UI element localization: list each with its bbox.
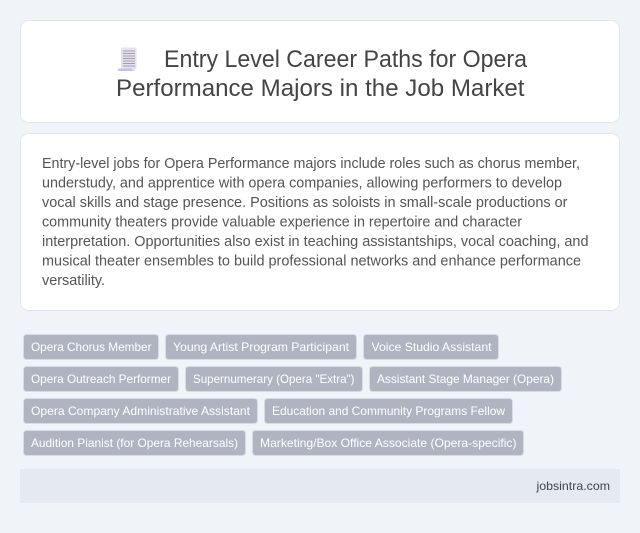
tag: Opera Chorus Member: Opera Chorus Member: [31, 340, 152, 354]
tag: Marketing/Box Office Associate: Marketing/Box Office Associate (Opera-specific): [260, 436, 516, 450]
icon: scroll document: [118, 48, 136, 71]
description text: interpretation. Opportunities also exist in teaching assistantships, vocal coaching, and: [42, 234, 588, 250]
title: [116, 46, 528, 102]
tag: Marketing/Box Office Associate: [252, 430, 524, 456]
tag: Opera Company Administrative Assistant: Opera Company Administrative Assistant: [31, 404, 251, 418]
title: Entry Level Career Paths for Opera: [164, 46, 528, 73]
tag: Assistant Stage Manager: [370, 366, 562, 392]
title: Performance Majors in the Job Market: [116, 75, 525, 102]
tag: Education and Community Programs Fellow: Education and Community Programs Fellow: [272, 404, 505, 418]
tags list: [24, 334, 562, 456]
description text: vocal skills and stage presence. Positions as soloists in small-scale productions or: [42, 195, 568, 211]
description text: versatility.: [42, 273, 105, 289]
footer source: jobsintra.com: [535, 479, 610, 493]
tag: Young Artist Program Participant: [166, 334, 356, 360]
description text: community theaters provide valuable experience in repertoire and character: [42, 214, 522, 230]
description text: Entry-level jobs for Opera Performance majors include roles such as chorus member,: [42, 156, 580, 172]
tag: Voice Studio Assistant: Voice Studio Assistant: [372, 340, 492, 354]
description text: musical theater ensembles to build professional networks and enhance performance: [42, 254, 581, 270]
tag: Opera Chorus Member: [24, 334, 158, 360]
tag: Opera Company Administrative Assistant: [24, 398, 258, 424]
description text: understudy, and apprentice with opera companies, allowing performers to develop: [42, 176, 562, 192]
tag: Supernumerary: Supernumerary (Opera "Extra"): [193, 372, 354, 386]
tag: Supernumerary: [186, 366, 362, 392]
tag: Opera Outreach Performer: Opera Outreach Performer: [31, 372, 171, 386]
tag: Voice Studio Assistant: [364, 334, 498, 360]
panel: header card: [20, 20, 620, 122]
panel: description card: [20, 134, 620, 310]
tag: Education and Community Programs Fellow: [264, 398, 512, 424]
tag: Assistant Stage Manager: Assistant Stage Manager (Opera): [377, 372, 554, 386]
tag: Audition Pianist: Audition Pianist (for Opera Rehearsals): [31, 436, 238, 450]
footer bar: [20, 469, 620, 503]
tag: Opera Outreach Performer: [24, 366, 178, 392]
tag: Audition Pianist: [24, 430, 246, 456]
description text: [42, 156, 588, 289]
tag: Young Artist Program Participant: Young Artist Program Participant: [173, 340, 350, 354]
